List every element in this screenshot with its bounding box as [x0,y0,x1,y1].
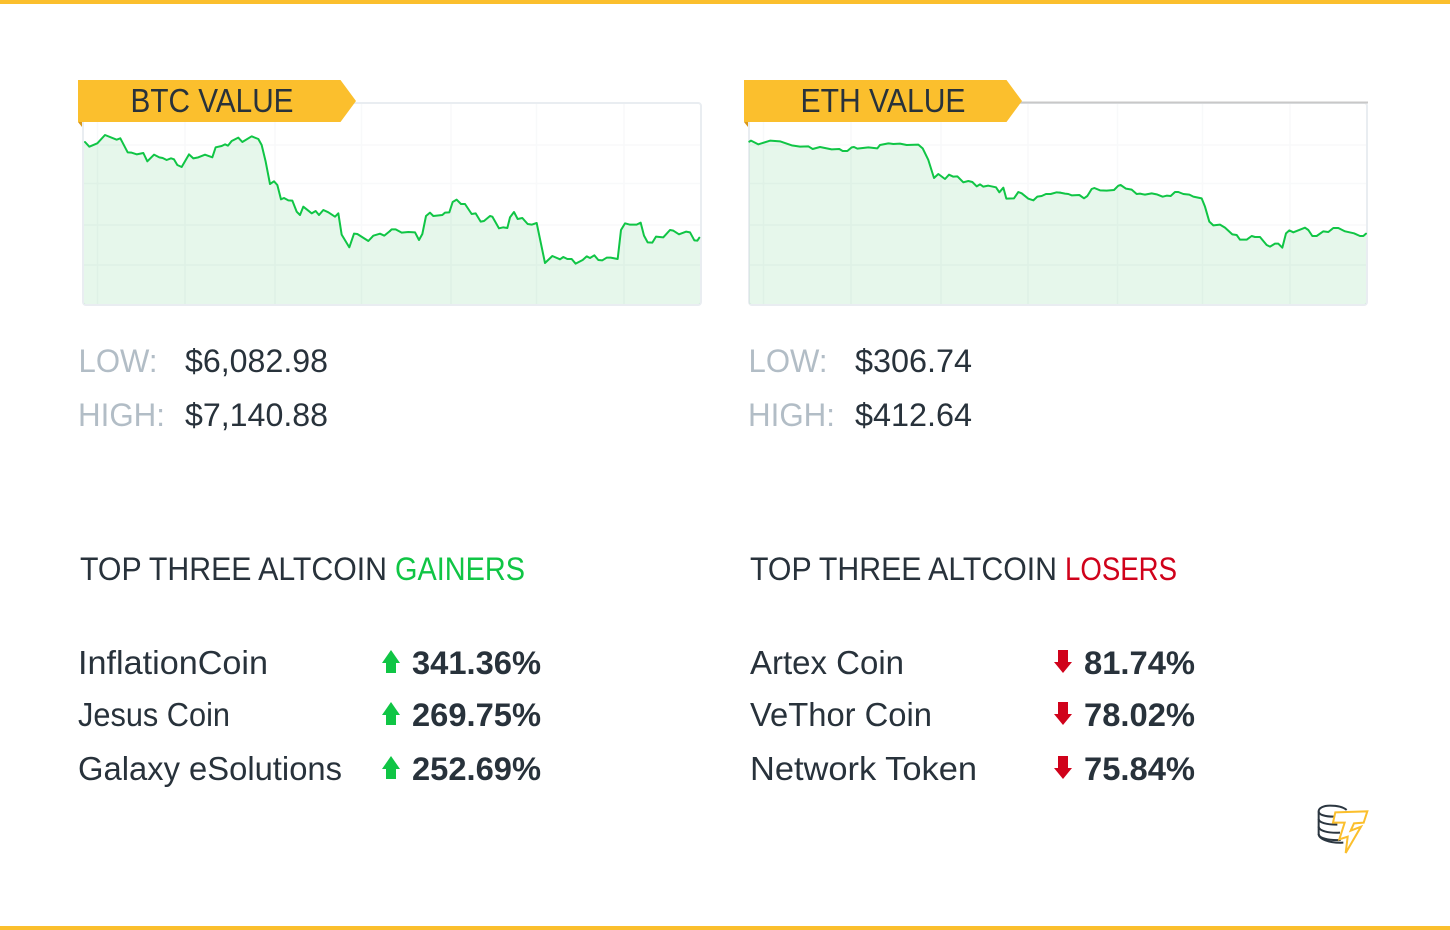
banner: BTC VALUE: BTC VALUE [130,82,294,119]
text: BTC high: $7,140.88 [185,397,328,433]
icon: coin stack and lightning logo [1319,806,1367,853]
row: Galaxy eSolutions [78,750,541,787]
row: InflationCoin [78,644,541,681]
banner: ETH VALUE: ETH VALUE [800,82,966,119]
row: VeThor Coin [750,696,1195,733]
row: Artex Coin: Artex Coin [750,644,904,681]
row: Network Token: 75.84% [1084,751,1195,787]
text: ETH low [748,343,972,379]
banner: BTC VALUE [78,80,356,127]
row: InflationCoin: 341.36% [412,645,541,681]
panel: top gainers [78,551,541,787]
heading: top three altcoin losers: LOSERS [1065,551,1177,587]
row: VeThor Coin: 78.02% [1084,697,1195,733]
row: Jesus Coin: 269.75% [412,697,541,733]
banner: ETH VALUE [744,80,1022,127]
text: BTC low [78,343,328,379]
panel: ETH value [744,80,1368,433]
panel: top losers [750,551,1195,787]
panel: BTC value [78,80,701,433]
row: Jesus Coin [78,696,541,733]
text: BTC high: HIGH: [78,397,165,433]
text: BTC low: $6,082.98 [185,343,328,379]
row: Network Token [750,750,1195,787]
row: Jesus Coin: Jesus Coin [78,696,230,733]
chart: ETH area line chart [749,102,1368,305]
text: ETH high: $412.64 [855,397,972,433]
row: Artex Coin: 81.74% [1084,645,1195,681]
row: Artex Coin [750,644,1195,681]
text: ETH low: $306.74 [855,343,972,379]
row: Galaxy eSolutions: Galaxy eSolutions [78,750,342,787]
row: InflationCoin: InflationCoin [78,644,268,681]
row: Galaxy eSolutions: 252.69% [412,751,541,787]
text: ETH high: HIGH: [748,397,835,433]
row: Network Token: Network Token [750,750,977,787]
heading: top three altcoin gainers: GAINERS [395,551,525,587]
text: BTC high [78,397,328,433]
heading: top three altcoin losers: TOP THREE ALTCOIN [750,551,1057,587]
row: VeThor Coin: VeThor Coin [750,696,932,733]
heading: top three altcoin gainers: TOP THREE ALTCOIN [80,551,387,587]
text: BTC low: LOW: [78,343,158,379]
text: ETH high [748,397,972,433]
text: ETH low: LOW: [748,343,828,379]
chart: BTC area line chart [83,103,701,305]
